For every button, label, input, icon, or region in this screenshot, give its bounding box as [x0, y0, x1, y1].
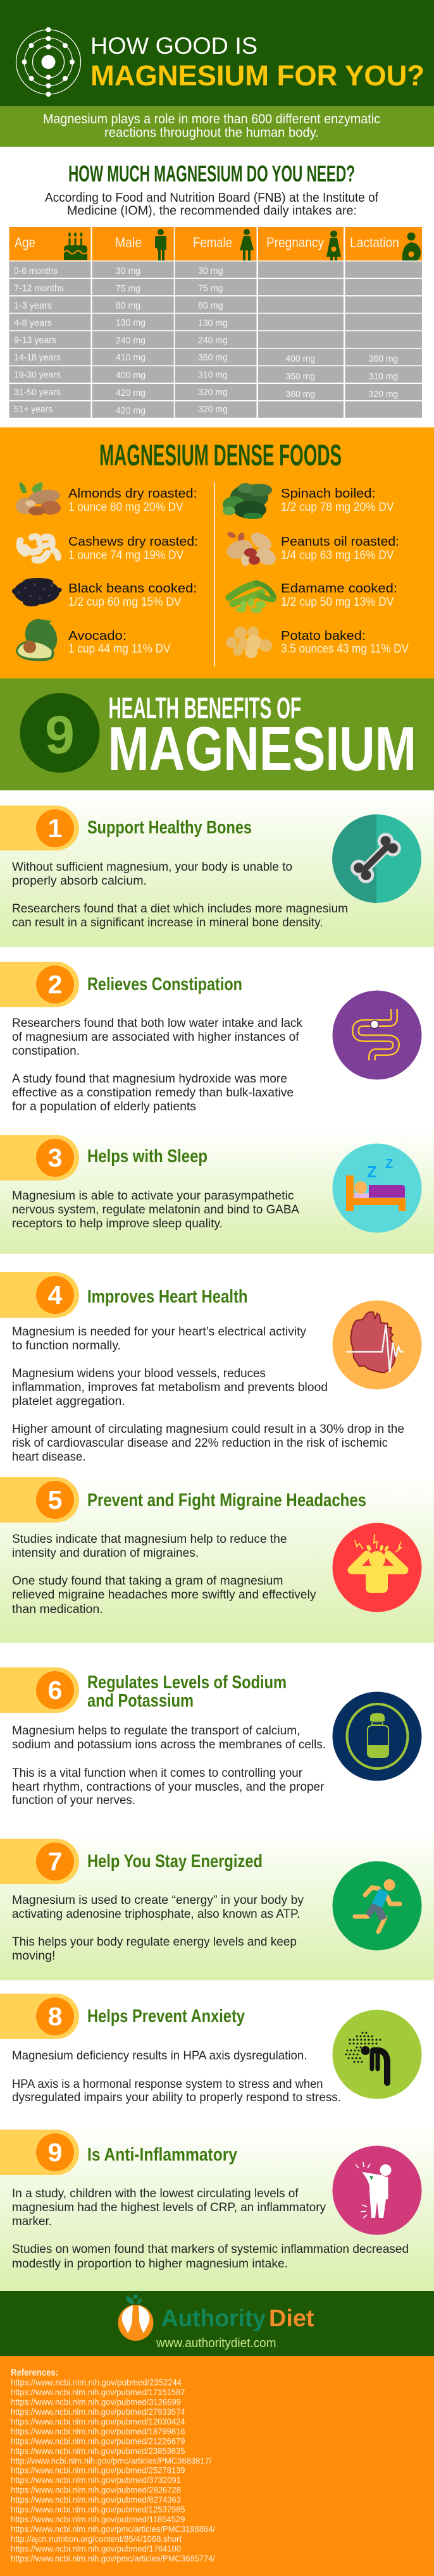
panel: benefit 4: [0, 1272, 421, 1464]
text 7: [12, 1894, 304, 1963]
table values: 360 mg: [198, 353, 228, 363]
logo wordmark: [161, 2305, 314, 2332]
number badge 8: 8: [48, 2002, 62, 2031]
table values: 350 mg: [286, 372, 315, 382]
table values: 0-6 months: [14, 266, 58, 276]
references list: http://www.ncbi.nlm.nih.gov/pmc/articles/PMC3683817/: [11, 2455, 212, 2465]
text 2: constipation.: [12, 1045, 80, 1058]
text: edamame: 1/2 cup 50 mg 13% DV: [281, 596, 394, 609]
icon: birthday cake: [64, 233, 87, 260]
table rows: [9, 262, 422, 418]
panel: benefit 1: [0, 790, 434, 947]
text 8: [12, 2049, 341, 2104]
text 2: for a population of elderly patients: [12, 1100, 196, 1113]
text 5: One study found that taking a gram of magnesium: [12, 1574, 283, 1588]
icon: person sleeping: [333, 1143, 421, 1233]
panel: benefit 2: [0, 962, 421, 1113]
references list: https://www.ncbi.nlm.nih.gov/pubmed/12537985: [11, 2505, 185, 2515]
table values: 80 mg: [198, 301, 223, 311]
footer: logo: [0, 2291, 434, 2356]
text 8: dysregulated impairs your ability to properly respond to stress.: [12, 2091, 341, 2104]
number badge 1: [0, 806, 79, 850]
text 7: activating adenosine triphosphate, also known as ATP.: [12, 1908, 300, 1921]
text 3: receptors to help improve sleep quality.: [12, 1217, 223, 1230]
icon: heart with pulse: [333, 1300, 421, 1390]
banner: 9 health benefits: [0, 678, 434, 790]
text 4: inflammation, improves fat metabolism and prevents blood: [12, 1381, 328, 1394]
number badge 8: [0, 1994, 79, 2039]
number badge 4: 4: [48, 1280, 63, 1309]
text 3: Magnesium is able to activate your parasympathetic: [12, 1189, 294, 1203]
references list: https://www.ncbi.nlm.nih.gov/pubmed/12030424: [11, 2416, 185, 2426]
logo wordmark: Diet: [269, 2305, 314, 2332]
intake intro text: [45, 191, 378, 218]
table values: 75 mg: [198, 283, 223, 293]
text: edamame: [281, 582, 397, 609]
panel: benefit 7: [0, 1831, 434, 1980]
text: spinach: 1/2 cup 78 mg 20% DV: [281, 501, 394, 514]
intake intro text: According to Food and Nutrition Board (FNB) at the Institute of: [45, 191, 378, 205]
icon: female figure: [240, 229, 254, 261]
text 4: Higher amount of circulating magnesium could result in a 30% drop in the: [12, 1423, 404, 1436]
banner heading line 1: HEALTH BENEFITS OF: [109, 691, 301, 725]
references list: https://www.ncbi.nlm.nih.gov/pubmed/8274363: [11, 2494, 181, 2505]
icon: anxious person: [333, 2009, 421, 2099]
icon: male figure: [155, 229, 166, 261]
icon: edamame: [229, 583, 274, 613]
text: almonds: 1 ounce 80 mg 20% DV: [68, 501, 183, 514]
icon: mother nursing: [402, 233, 421, 261]
table values: 14-18 years: [14, 353, 61, 363]
panel: benefit 3: [0, 1129, 434, 1254]
panel: magnesium dense foods: [0, 427, 434, 678]
references list: https://www.ncbi.nlm.nih.gov/pubmed/23853635: [11, 2446, 185, 2456]
icon: bone: [332, 814, 421, 903]
text 8: HPA axis is a hormonal response system to stress and when: [12, 2078, 323, 2091]
icon: peanuts: [225, 529, 279, 568]
icon: almonds: [16, 482, 61, 515]
icon: magnesium atom: [16, 27, 81, 97]
table values: 31-50 years: [14, 388, 61, 398]
text 5: relieved migraine headaches more swiftly and effectively: [12, 1588, 316, 1602]
heading 1: Support Healthy Bones: [87, 818, 252, 838]
text 9: magnesium had the highest levels of CRP, an inflammatory: [12, 2201, 326, 2214]
header banner: [0, 0, 434, 106]
text 1: Researchers found that a diet which includes more magnesium: [12, 902, 348, 916]
text 6: [12, 1724, 326, 1807]
table values: 130 mg: [198, 319, 228, 329]
table values: 51+ years: [14, 405, 53, 415]
text 6: heart rhythm, contractions of your muscles, and the proper: [12, 1781, 325, 1794]
table values: [14, 266, 398, 416]
text 4: Magnesium widens your blood vessels, reduces: [12, 1367, 266, 1380]
heading 8: Helps Prevent Anxiety: [87, 2006, 245, 2027]
text 4: risk of cardiovascular disease and 22% reduction in the risk of ischemic: [12, 1437, 388, 1450]
table values: 80 mg: [116, 301, 140, 311]
icon: intestines: [333, 990, 421, 1080]
text 9: marker.: [12, 2215, 52, 2228]
table values: 310 mg: [369, 372, 398, 382]
text 6: This is a vital function when it comes to controlling your: [12, 1767, 303, 1780]
references list: http://ajcn.nutrition.org/content/85/4/1068.short: [11, 2534, 182, 2544]
text 7: This helps your body regulate energy levels and keep: [12, 1935, 297, 1949]
icon: person sleeping: Z: [385, 1157, 393, 1171]
number badge 9: [0, 2130, 79, 2175]
text: cashews: Cashews dry roasted:: [68, 535, 198, 549]
table values: 420 mg: [116, 388, 146, 398]
text 3: nervous system, regulate melatonin and bind to GABA: [12, 1203, 299, 1217]
intro band: reactions throughout the human body.: [104, 125, 319, 140]
icon: black beans: [12, 578, 62, 606]
text 7: Magnesium is used to create “energy” in your body by: [12, 1894, 304, 1907]
text 1: Without sufficient magnesium, your body is unable to: [12, 861, 292, 874]
icon: spinach: [223, 483, 272, 519]
number badge 7: 7: [48, 1847, 62, 1876]
table values: 310 mg: [198, 371, 228, 381]
icon: back pain: [333, 2146, 421, 2235]
intake intro text: Medicine (IOM), the recommended daily intakes are:: [67, 204, 357, 218]
website url: www.authoritydiet.com: [156, 2336, 276, 2350]
table values: 4-8 years: [14, 319, 52, 329]
number badge 5: [0, 1477, 79, 1523]
badge: number 9: 9: [45, 705, 75, 764]
text: peanuts: Peanuts oil roasted:: [281, 535, 399, 549]
table values: 400 mg: [286, 354, 315, 364]
table values: 1-3 years: [14, 301, 52, 311]
table values: 410 mg: [116, 353, 146, 363]
heading 9: Is Anti-Inflammatory: [87, 2145, 237, 2165]
number badge 5: 5: [48, 1485, 62, 1514]
references list: https://www.ncbi.nlm.nih.gov/pubmed/27933574: [11, 2407, 185, 2417]
text 2: of magnesium are associated with higher instances of: [12, 1031, 299, 1044]
text 6: function of your nerves.: [12, 1794, 135, 1807]
text 9: [12, 2187, 409, 2271]
table values: 400 mg: [116, 371, 146, 381]
references heading: References:: [11, 2367, 58, 2378]
panel: benefit 6: [0, 1667, 421, 1807]
heading 6: Regulates Levels of Sodium: [87, 1672, 287, 1693]
text: black beans: 1/2 cup 60 mg 15% DV: [68, 596, 182, 609]
text: almonds: [68, 487, 197, 514]
table values: 75 mg: [116, 284, 140, 294]
table header: Lactation: [350, 235, 399, 250]
text: avocado: Avocado:: [68, 629, 127, 643]
text 2: [12, 1017, 302, 1113]
text: avocado: [68, 629, 171, 656]
icon: cashews: [20, 536, 58, 560]
text 4: heart disease.: [12, 1451, 86, 1464]
number badge 2: 2: [48, 970, 62, 999]
table values: 240 mg: [116, 336, 146, 346]
table header: [9, 227, 422, 261]
number badge 9: 9: [48, 2138, 62, 2167]
text: cashews: [68, 535, 198, 562]
references list: https://www.ncbi.nlm.nih.gov/pubmed/18799816: [11, 2426, 185, 2436]
intro band: Magnesium plays a role in more than 600 different enzymatic: [43, 112, 380, 126]
text 9: In a study, children with the lowest circulating levels of: [12, 2187, 299, 2200]
text: avocado: 1 cup 44 mg 11% DV: [68, 642, 171, 656]
text 2: effective as a constipation remedy than bulk-laxative: [12, 1086, 294, 1100]
number badge 4: [0, 1272, 79, 1318]
title line 2: MAGNESIUM FOR YOU?: [90, 59, 425, 92]
text 7: moving!: [12, 1949, 56, 1963]
heading 2: Relieves Constipation: [87, 974, 242, 995]
text 5: than medication.: [12, 1603, 103, 1616]
text 4: [12, 1325, 404, 1464]
references list: https://www.ncbi.nlm.nih.gov/pubmed/11854529: [11, 2514, 185, 2524]
references list: https://www.ncbi.nlm.nih.gov/pubmed/21226679: [11, 2436, 185, 2446]
text: edamame: Edamame cooked:: [281, 582, 397, 596]
text 9: modestly in proportion to higher magnesium intake.: [12, 2257, 288, 2271]
text: spinach: [281, 487, 394, 514]
heading 3: Helps with Sleep: [87, 1146, 208, 1167]
references list: https://www.ncbi.nlm.nih.gov/pmc/articles/PMC3198864/: [11, 2524, 215, 2534]
number badge 3: 3: [48, 1143, 62, 1172]
text 4: to function normally.: [12, 1339, 121, 1352]
heading 7: Help You Stay Energized: [87, 1851, 263, 1872]
text: black beans: Black beans cooked:: [68, 582, 197, 596]
table values: 360 mg: [286, 389, 315, 400]
number badge 6: 6: [48, 1676, 62, 1705]
table values: 30 mg: [198, 266, 223, 276]
table values: 130 mg: [116, 318, 146, 328]
text 2: A study found that magnesium hydroxide was more: [12, 1072, 287, 1086]
table values: 240 mg: [198, 336, 228, 346]
text 9: Studies on women found that markers of systemic inflammation decreased: [12, 2243, 409, 2256]
text: peanuts: [281, 535, 399, 562]
text 1: can result in a significant increase in mineral bone density.: [12, 916, 323, 929]
table header: Age: [15, 235, 35, 250]
heading 6: [87, 1672, 287, 1711]
references list: https://www.ncbi.nlm.nih.gov/pubmed/3126699: [11, 2396, 181, 2407]
table values: 7-12 months: [14, 283, 64, 293]
table values: 320 mg: [369, 389, 398, 400]
panel: benefit 9: [0, 2125, 434, 2291]
references list: https://www.ncbi.nlm.nih.gov/pubmed/25278139: [11, 2465, 185, 2475]
icon: runner: [333, 1861, 421, 1950]
text: black beans: [68, 582, 197, 609]
text 8: Magnesium deficiency results in HPA axis dysregulation.: [12, 2049, 307, 2063]
heading 5: Prevent and Fight Migraine Headaches: [87, 1490, 366, 1511]
references list: https://www.ncbi.nlm.nih.gov/pmc/articles/PMC3685774/: [11, 2553, 215, 2563]
text 1: properly absorb calcium.: [12, 874, 147, 888]
text 5: intensity and duration of migraines.: [12, 1547, 199, 1560]
icon: migraine headache: [333, 1523, 421, 1612]
icon: potatoes: [226, 627, 272, 658]
references list: https://www.ncbi.nlm.nih.gov/pubmed/17151587: [11, 2387, 185, 2397]
heading 6: and Potassium: [87, 1691, 194, 1711]
text: potato: [281, 629, 409, 656]
panel: references: [0, 2356, 434, 2576]
icon: Authority Diet logo: [118, 2294, 153, 2341]
text: peanuts: 1/4 cup 63 mg 16% DV: [281, 549, 394, 562]
text 4: platelet aggregation.: [12, 1395, 125, 1408]
text 2: Researchers found that both low water intake and lack: [12, 1017, 302, 1030]
references list: https://www.ncbi.nlm.nih.gov/pubmed/3732091: [11, 2475, 181, 2485]
text: potato: 3.5 ounces 43 mg 11% DV: [281, 642, 409, 656]
text: almonds: Almonds dry roasted:: [68, 487, 197, 501]
number badge 6: [0, 1667, 79, 1713]
text 5: Studies indicate that magnesium help to reduce the: [12, 1533, 287, 1546]
table values: 30 mg: [116, 266, 140, 276]
panel: benefit 5: [0, 1476, 434, 1643]
panel: benefit 8: [0, 1994, 421, 2104]
table: recommended daily intake: [9, 227, 422, 418]
table values: 9-13 years: [14, 335, 56, 345]
table values: 420 mg: [116, 406, 146, 416]
references list: [11, 2377, 215, 2563]
references list: https://www.ncbi.nlm.nih.gov/pubmed/1764100: [11, 2543, 181, 2553]
logo wordmark: Authority: [161, 2305, 266, 2332]
text 6: sodium and potassium ions across the membranes of cells.: [12, 1738, 326, 1751]
table values: 320 mg: [198, 388, 228, 398]
number badge 1: 1: [48, 814, 62, 843]
number badge 3: [0, 1135, 79, 1181]
number badge 2: [0, 962, 79, 1007]
table header: Pregnancy: [266, 235, 324, 250]
icon: salt shaker: [333, 1692, 421, 1781]
text: spinach: Spinach boiled:: [281, 487, 376, 501]
references list: https://www.ncbi.nlm.nih.gov/pubmed/2352244: [11, 2377, 182, 2388]
intro band: [0, 106, 434, 147]
table values: 320 mg: [198, 405, 228, 415]
text 3: [12, 1189, 299, 1230]
icon: person sleeping: Z: [367, 1162, 377, 1181]
table header: Male: [115, 235, 142, 250]
table values: 19-30 years: [14, 371, 61, 381]
icon: avocado: [16, 613, 63, 661]
text 1: [12, 861, 348, 929]
icon: pregnant figure: [326, 230, 341, 261]
badge: number 9: [20, 693, 100, 773]
references list: https://www.ncbi.nlm.nih.gov/pubmed/2826728: [11, 2485, 181, 2495]
table header: Female: [193, 235, 232, 250]
text 4: Magnesium is needed for your heart’s electrical activity: [12, 1325, 307, 1339]
number badge 7: [0, 1839, 79, 1884]
table values: 360 mg: [369, 354, 398, 364]
text 5: [12, 1533, 316, 1616]
text 6: Magnesium helps to regulate the transport of calcium,: [12, 1724, 300, 1738]
text: potato: Potato baked:: [281, 629, 366, 643]
title line 1: HOW GOOD IS: [90, 33, 257, 59]
heading 4: Improves Heart Health: [87, 1287, 248, 1307]
text: cashews: 1 ounce 74 mg 19% DV: [68, 549, 183, 562]
